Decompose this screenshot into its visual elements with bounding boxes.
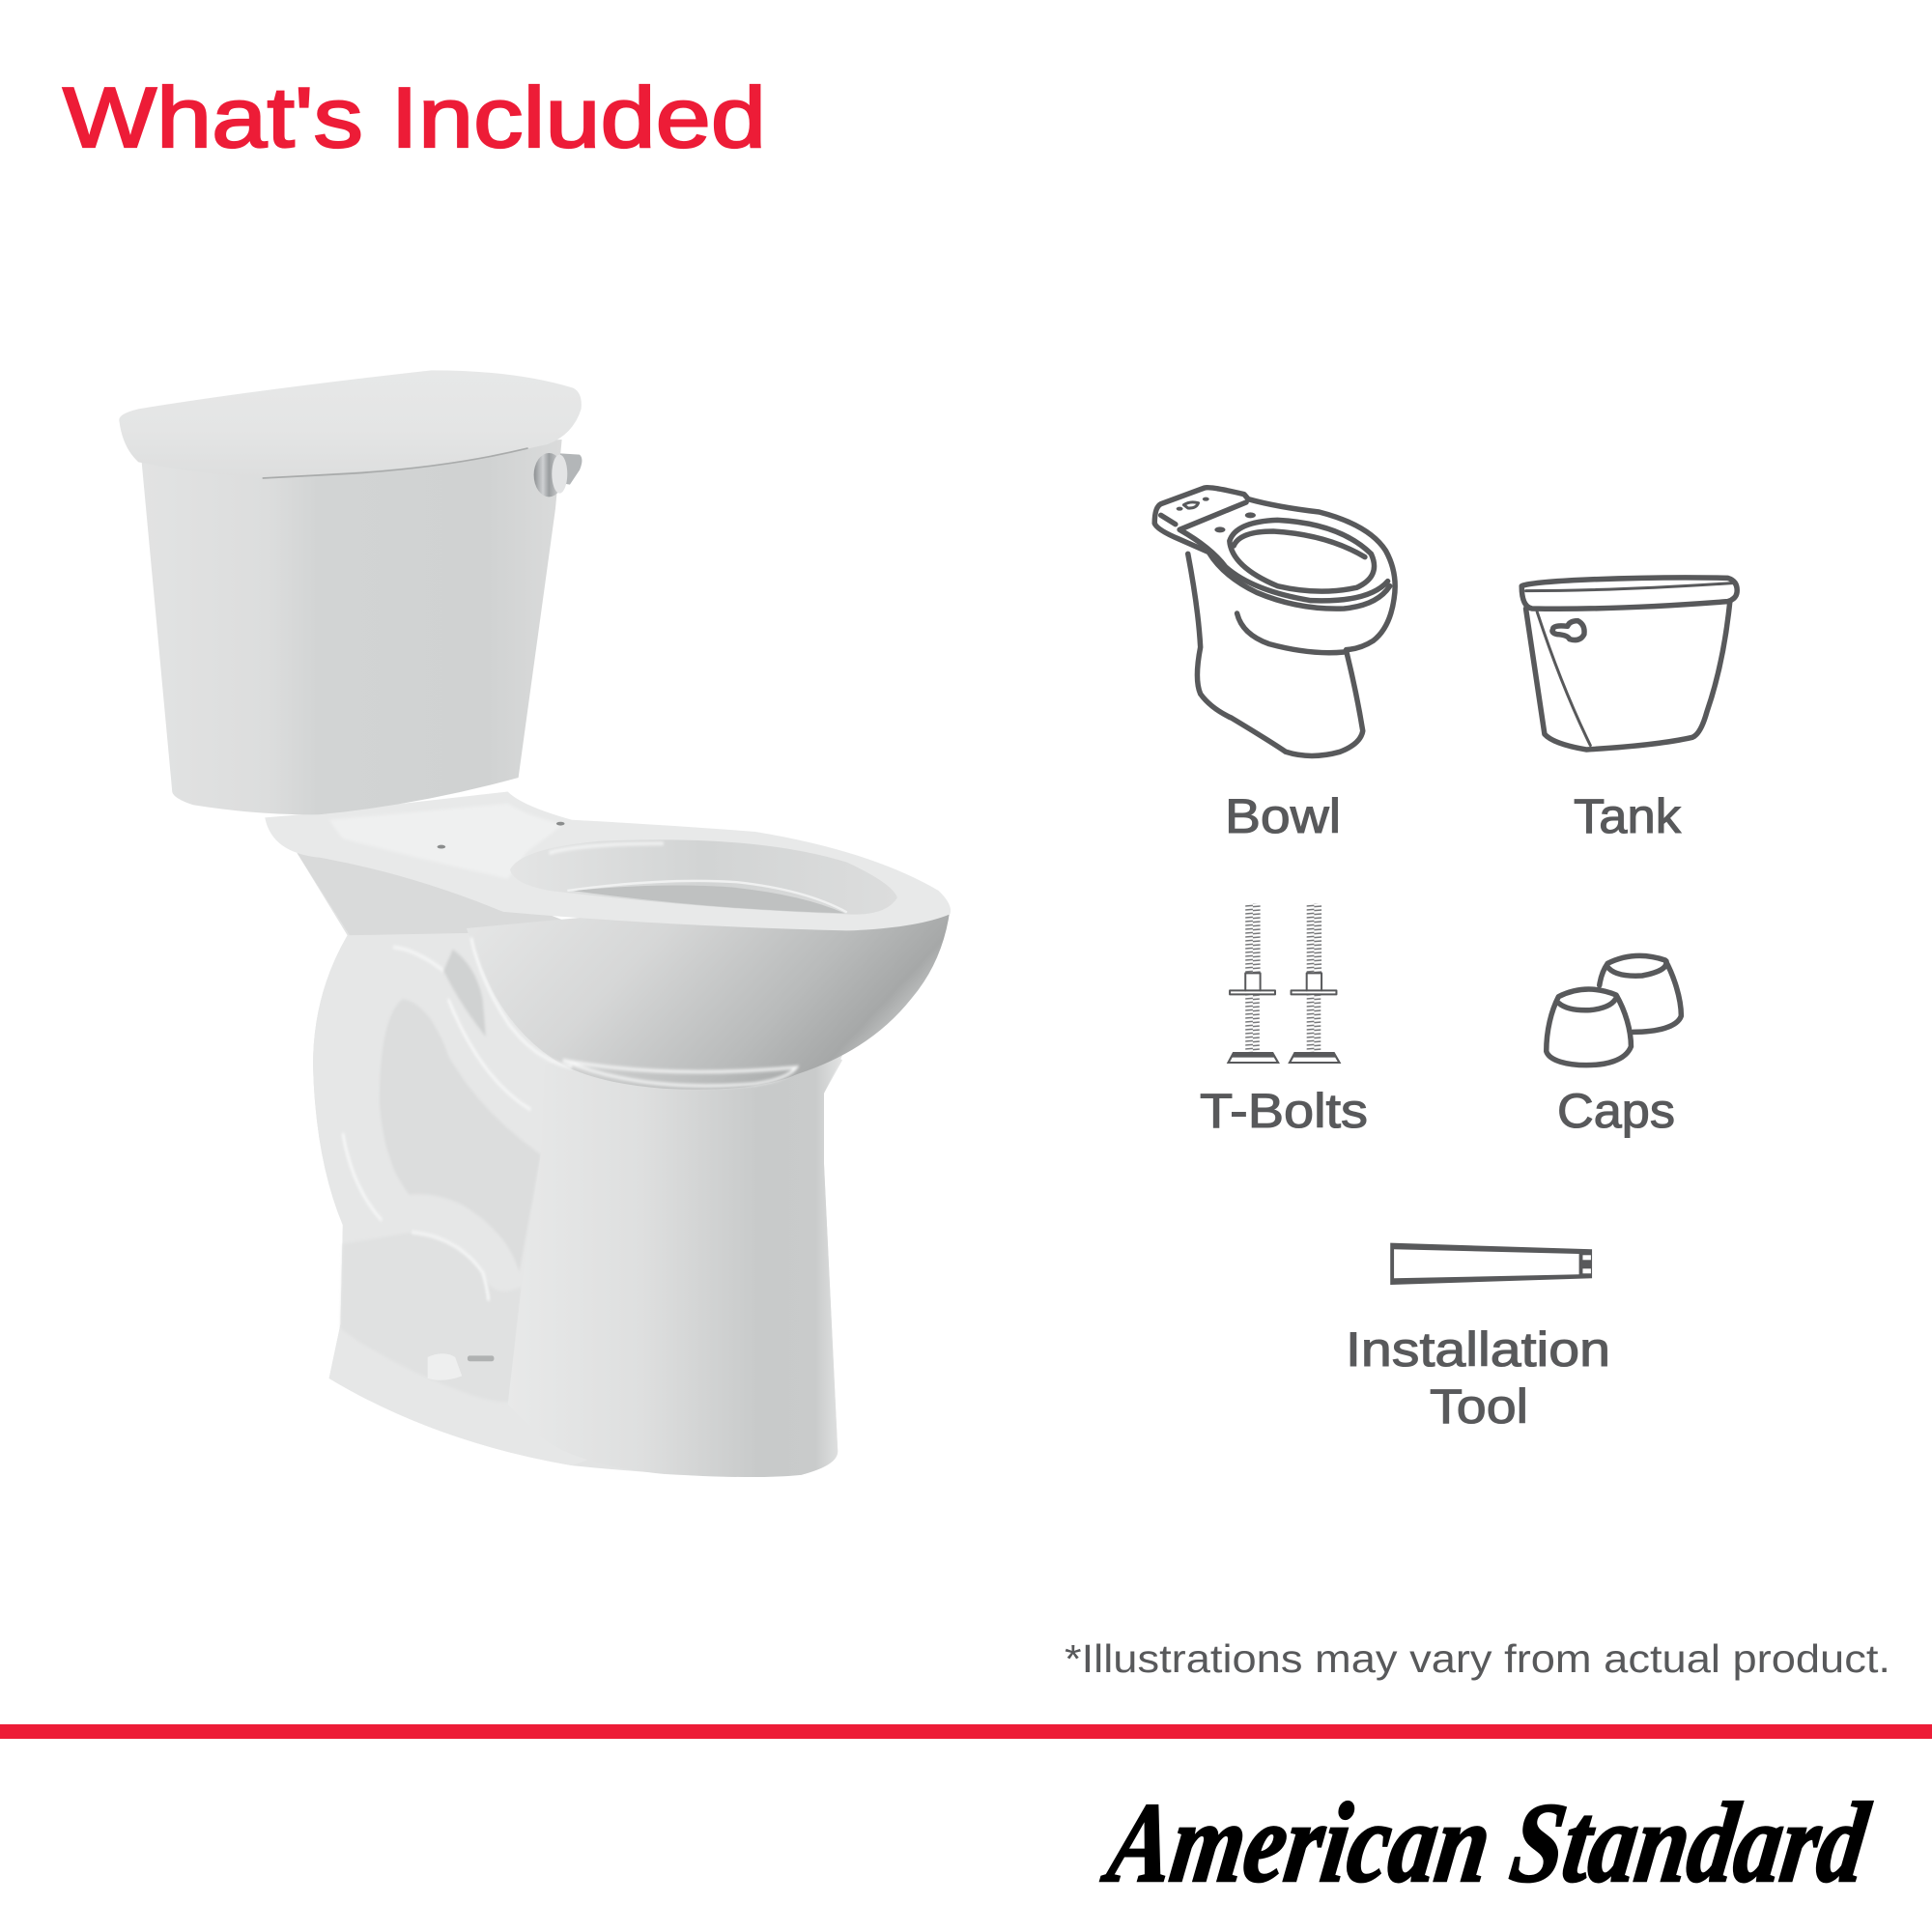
deck and rim: [265, 792, 951, 930]
tank lid: [119, 370, 582, 478]
base pocket: [341, 1233, 522, 1402]
icon: caps: [1547, 955, 1681, 1065]
title: What's Included: [63, 70, 766, 165]
deck highlight: [329, 804, 563, 879]
under-rim ledge highlight: [567, 881, 847, 912]
dark fold of the recess: [443, 950, 486, 1037]
highlights: [343, 843, 797, 1300]
bolt cap: [428, 1353, 462, 1380]
flush handle: [534, 453, 564, 497]
label: Tank: Tank: [1574, 789, 1682, 843]
red divider bar: [0, 1724, 1932, 1739]
label: Installation Tool: [1346, 1322, 1610, 1434]
lid seam: [263, 448, 528, 478]
toilet bowl and pedestal: [265, 792, 951, 1477]
label: Installation Tool: Tool: [1430, 1379, 1528, 1434]
bolt two: [1290, 903, 1340, 1063]
trapway side: [313, 933, 664, 1465]
flush handle face: [552, 455, 567, 494]
bowl interior: [572, 886, 844, 913]
label: T-Bolts: T-Bolts: [1200, 1084, 1368, 1138]
holes: [438, 822, 564, 849]
icon: tank: [1521, 578, 1737, 750]
silhouette base fill: [297, 853, 842, 1476]
flush handle lever: [560, 453, 582, 485]
icon: T-bolts: [1229, 903, 1340, 1063]
bowl underside: [467, 909, 950, 1090]
bolt one: [1229, 903, 1278, 1063]
label: Installation Tool: Installation: [1346, 1322, 1610, 1377]
product photo: two-piece toilet: [119, 370, 951, 1477]
footnote: *Illustrations may vary from actual product.: [1065, 1636, 1890, 1681]
icon: bowl: [1154, 488, 1395, 755]
pedestal: [508, 1037, 842, 1477]
trapway recess: [380, 999, 541, 1272]
label: Caps: Caps: [1557, 1084, 1675, 1138]
rim opening: [510, 839, 897, 915]
icon: installation tool: [1390, 1243, 1592, 1285]
bolt: [468, 1355, 494, 1361]
label: Bowl: Bowl: [1225, 789, 1341, 843]
toilet tank: [119, 370, 582, 814]
tank body: [142, 440, 562, 814]
neck under deck: [297, 853, 572, 935]
